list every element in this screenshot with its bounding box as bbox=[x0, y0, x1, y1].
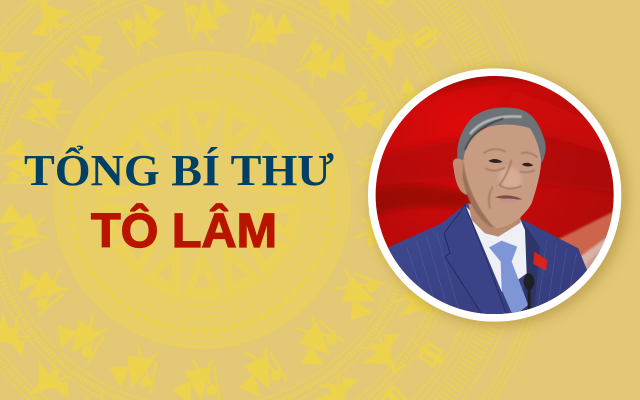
lapel pin flag bbox=[533, 252, 547, 271]
white frame bbox=[368, 68, 621, 322]
figures ring bbox=[0, 0, 409, 400]
name: Tô Lâm: TÔ LÂM bbox=[91, 203, 277, 258]
face bbox=[463, 123, 541, 228]
ear bbox=[453, 158, 467, 195]
eyes bbox=[488, 159, 533, 166]
suit bbox=[388, 203, 588, 323]
hair bbox=[457, 107, 546, 163]
portrait shadow bbox=[371, 70, 627, 326]
neck bbox=[468, 203, 521, 237]
brows and facial shadows bbox=[483, 149, 537, 208]
shirt bbox=[466, 207, 527, 292]
photo bbox=[376, 76, 614, 314]
title: Tổng Bí Thư: TỔNG BÍ THƯ bbox=[24, 144, 334, 195]
portrait bbox=[368, 60, 630, 330]
outer motif ring bbox=[327, 0, 474, 400]
mouth bbox=[495, 195, 523, 199]
microphone bbox=[524, 273, 534, 310]
birds ring bbox=[0, 0, 450, 400]
inner star triangles bbox=[100, 100, 304, 300]
tie bbox=[489, 241, 528, 317]
